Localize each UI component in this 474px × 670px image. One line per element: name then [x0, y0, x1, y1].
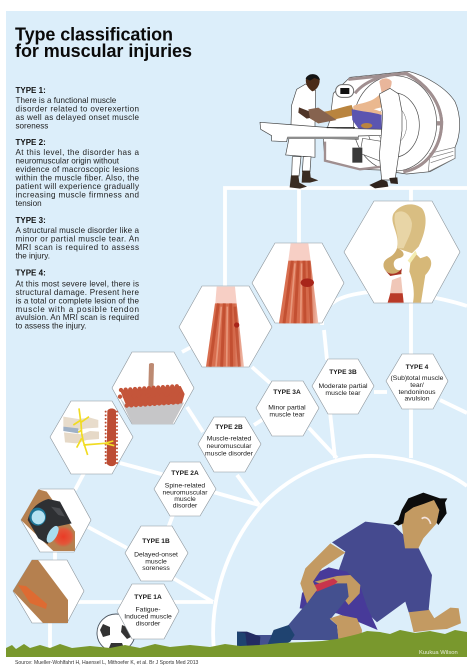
boots — [237, 625, 295, 647]
right arm — [409, 608, 461, 632]
near leg and sock — [237, 583, 349, 647]
title: Type classification — [15, 24, 173, 44]
label hexagon: type 2A: muscle — [174, 496, 196, 503]
text block: type 4: TYPE 4: — [16, 268, 46, 278]
text block: type 1: There is a functional muscle — [16, 96, 117, 105]
text block: type 3 — [16, 216, 139, 260]
label hexagon: type 4 — [386, 354, 448, 409]
label hexagon: type 1A: Induced muscle — [124, 614, 172, 620]
hexagon image: moderate muscle tear — [252, 243, 344, 323]
illustration: MRI scanner with staff — [260, 71, 460, 189]
label hexagon: type 4: tear/ — [410, 382, 424, 389]
text block: type 4: avulsion. An MRI scan is required — [16, 313, 139, 322]
label hexagon: type 4: tendoninous — [398, 389, 436, 396]
grass — [6, 630, 467, 657]
left doctor — [286, 74, 320, 189]
text block: type 1: as well as delayed onset muscle — [16, 113, 139, 122]
hexagon image: spine and nerve — [50, 401, 133, 474]
label hexagon: type 3B: muscle tear — [325, 390, 361, 397]
label hexagon: type 4: TYPE 4 — [406, 364, 429, 371]
label hexagon: type 2B: muscle disorder — [205, 450, 254, 458]
text block: type 2: increasing muscle firmness and — [16, 190, 139, 200]
label hexagon: type 1A: Fatigue- — [136, 606, 160, 614]
label hexagon: type 2A — [154, 462, 216, 516]
label hexagon: type 1A — [97, 584, 179, 652]
text block: type 1: soreness — [16, 121, 48, 130]
text block: type 3: minor or partial muscle tear. An — [16, 234, 139, 244]
title — [15, 24, 192, 61]
right doctor — [353, 78, 402, 188]
label hexagon: type 1B: Delayed-onset — [134, 552, 178, 558]
text block: type 3: TYPE 3: — [16, 216, 46, 225]
text block: type 2 — [14, 138, 140, 208]
label hexagon: type 1B: TYPE 1B — [142, 538, 170, 545]
illustration: injured footballer — [237, 493, 461, 647]
hexagon image: hip bone avulsion — [344, 201, 460, 303]
hexagon image: minor muscle tear — [179, 286, 272, 367]
patient — [308, 105, 382, 130]
hexagon image: muscle-related disorder — [112, 352, 194, 424]
source: Source: Mueller-Wohlfahrt H, Haensel L, Mithoefer K, et al. Br J Sports Med 2013 — [15, 660, 199, 666]
label hexagon: type 2B: TYPE 2B — [215, 424, 243, 431]
label hexagon: type 4: (Sub)total muscle — [391, 375, 444, 382]
label hexagon: type 2B: Muscle-related — [207, 436, 252, 442]
monitor — [336, 85, 354, 97]
knee — [330, 615, 362, 642]
text block: type 2: within the muscle fiber. Also, the — [14, 174, 139, 182]
head — [393, 493, 447, 548]
credit: Kuukua Wilson — [419, 650, 458, 656]
text block: type 4: At this most severe level, there is — [16, 279, 139, 288]
MRI machine — [323, 71, 460, 174]
white network lines — [50, 188, 467, 650]
label hexagon: type 1B: muscle — [145, 558, 167, 566]
text block: type 1 — [16, 86, 139, 130]
bent thigh with injury — [315, 575, 360, 605]
text block: type 2: neuromuscular origin without — [16, 156, 120, 166]
label hexagon: type 3B: Moderate partial — [318, 383, 368, 390]
label hexagon: type 3A — [256, 381, 319, 436]
label hexagon: type 2B — [198, 417, 261, 472]
label hexagon: type 3A: Minor partial — [268, 404, 306, 412]
text block: type 2: At this level, the disorder has a — [16, 148, 139, 157]
shorts — [300, 567, 378, 630]
label hexagon: type 1A: disorder — [136, 620, 161, 628]
label hexagon: type 2A: TYPE 2A — [171, 470, 199, 477]
label hexagon: type 3A: muscle tear — [269, 412, 305, 418]
text block: type 4: to assess the injury. — [16, 322, 86, 330]
left arm — [300, 543, 345, 603]
text block: type 4: is a total or complete lesion of the — [16, 296, 139, 305]
label hexagon: type 1A: TYPE 1A — [134, 594, 162, 601]
text block: type 4: structural damage. Present here — [16, 288, 139, 297]
shirt — [332, 522, 432, 622]
text block: type 1: TYPE 1: — [16, 86, 46, 95]
label hexagon: type 1B — [125, 526, 188, 581]
label hexagon: type 2B: neuromuscular — [207, 443, 252, 450]
label hexagon: type 1B: soreness — [142, 565, 170, 572]
label hexagon: type 3A: TYPE 3A — [273, 389, 301, 396]
soccer ball — [97, 614, 135, 652]
text block: type 3: A structural muscle disorder like a — [16, 226, 139, 235]
label hexagon: type 4: avulsion — [405, 396, 430, 402]
label hexagon: type 2A: Spine-related — [165, 482, 205, 490]
text block: type 3: MRI scan is required to assess — [16, 243, 139, 252]
label hexagon: type 2A: neuromuscular — [163, 490, 208, 496]
text block: type 3: the injury. — [16, 252, 50, 260]
hexagon image: knee brace — [21, 489, 91, 552]
text block: type 1: disorder related to overexertion — [16, 104, 139, 113]
text block: type 4 — [16, 268, 139, 330]
hexagon image: leg fatigue — [13, 560, 84, 623]
text block: type 2: evidence of macroscopic lesions — [16, 165, 139, 174]
text block: type 2: tension — [16, 199, 42, 208]
text block: type 2: patient will experience gradually — [16, 182, 140, 191]
legs and left arm — [237, 543, 378, 647]
table — [260, 122, 382, 142]
label hexagon: type 3B: TYPE 3B — [329, 369, 357, 376]
title: for muscular injuries — [15, 41, 192, 61]
label hexagon: type 3B — [312, 359, 374, 414]
label hexagon: type 2A: disorder — [173, 502, 198, 510]
text block: type 4: muscle with a posible tendon — [16, 305, 139, 314]
text block: type 2: TYPE 2: — [16, 138, 46, 147]
